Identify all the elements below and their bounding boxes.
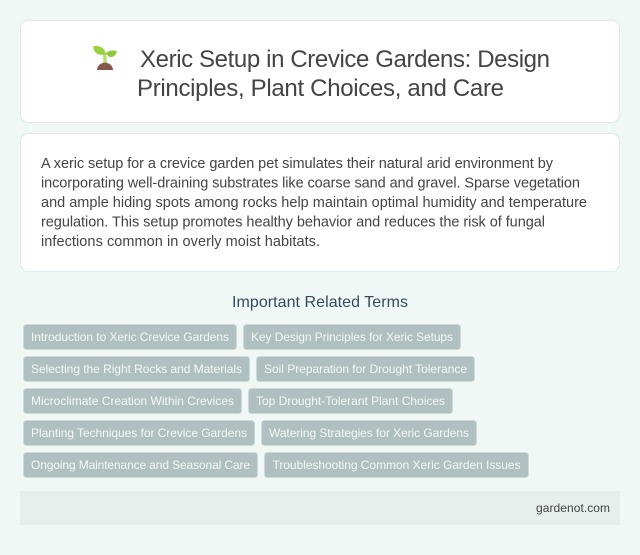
tag (24, 324, 236, 350)
tag (24, 452, 258, 478)
tag: Troubleshooting Common Xeric Garden Issues (272, 458, 520, 472)
text block: description: and ample hiding spots among rocks help maintain optimal humidity and temperature (41, 195, 587, 211)
heading: related terms: Important Related Terms (232, 294, 408, 311)
panel: title card (20, 20, 620, 122)
tag: Planting Techniques for Crevice Gardens (31, 426, 247, 440)
text block: description: infections common in overly moist habitats. (41, 234, 320, 250)
footer (20, 491, 620, 525)
tag (262, 420, 476, 446)
tag: Soil Preparation for Drought Tolerance (264, 362, 467, 376)
footer: gardenot.com (536, 501, 610, 515)
tag (264, 452, 528, 478)
text block: description: incorporating well-draining substrates like coarse sand and gravel. Sparse vegetation (41, 176, 580, 192)
title: Xeric Setup in Crevice Gardens: Design (140, 46, 550, 73)
title: Principles, Plant Choices, and Care (137, 75, 504, 102)
text block: description: regulation. This setup promotes healthy behavior and reduces the risk of fungal (41, 214, 545, 230)
text block: description: A xeric setup for a crevice garden pet simulates their natural arid environment by (41, 156, 554, 172)
tag: Ongoing Maintenance and Seasonal Care (31, 458, 250, 472)
tag: Top Drought-Tolerant Plant Choices (256, 394, 445, 408)
tag: Microclimate Creation Within Crevices (31, 394, 234, 408)
tag (256, 356, 474, 382)
tag: Key Design Principles for Xeric Setups (251, 330, 453, 344)
title (137, 46, 550, 102)
icon: sprout (93, 46, 117, 70)
text block: description (41, 156, 587, 250)
tag (24, 356, 250, 382)
tag list (24, 324, 528, 478)
tag: Selecting the Right Rocks and Materials (31, 362, 242, 376)
tag (24, 388, 242, 414)
tag (24, 420, 254, 446)
tag (248, 388, 452, 414)
panel: description (20, 134, 620, 272)
tag: Watering Strategies for Xeric Gardens (269, 426, 469, 440)
tag: Introduction to Xeric Crevice Gardens (31, 330, 229, 344)
tag (244, 324, 460, 350)
